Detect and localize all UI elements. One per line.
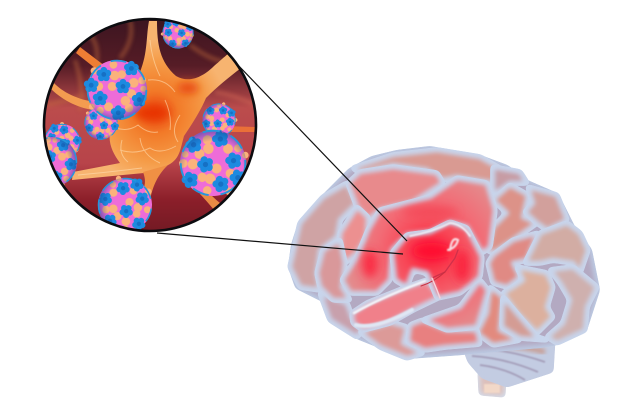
gyrus: left G xyxy=(317,240,350,300)
gyrus: lower right xyxy=(423,280,488,330)
gyrus: top xyxy=(353,150,503,183)
neuron cell body xyxy=(72,21,241,180)
gyrus: R4 xyxy=(525,223,588,273)
inset circle: neuron with virus particles xyxy=(42,18,258,232)
sulcus lines xyxy=(354,223,470,326)
gyrus: bottom mid xyxy=(408,320,480,350)
gyrus: R3 xyxy=(488,233,538,287)
inflamed red zones xyxy=(362,207,470,282)
gyrus: bottom left xyxy=(320,293,363,337)
gyrus: upper right xyxy=(493,167,527,195)
neuron left arm xyxy=(52,83,90,110)
gyrus: R8 xyxy=(502,297,547,340)
gyrus: R2 xyxy=(525,187,567,230)
gyrus: R7 xyxy=(477,287,520,345)
neuron lower process xyxy=(143,165,168,196)
inset background xyxy=(44,19,256,231)
gyrus: R6 xyxy=(547,267,597,343)
neuron right lower process xyxy=(200,194,220,208)
neuron right process xyxy=(230,126,255,132)
blurred background fibres xyxy=(46,20,255,110)
gyrus: left F xyxy=(340,207,368,263)
gyrus: R5 xyxy=(503,267,553,333)
gyrus: frontal left xyxy=(290,183,357,290)
inset ring xyxy=(44,19,256,231)
callout line: upper xyxy=(236,63,407,241)
gyrus: R1 xyxy=(487,185,537,253)
neuron upper-left arm xyxy=(76,47,102,68)
brain stem xyxy=(479,372,505,396)
brain xyxy=(290,148,598,396)
cerebellum xyxy=(462,338,555,387)
cerebrum base xyxy=(290,148,598,357)
gyrus: top frontal xyxy=(348,167,443,220)
gyrus: bottom xyxy=(360,322,423,358)
gyrus: central hot xyxy=(392,222,482,298)
callout line: lower xyxy=(157,233,403,254)
neuron hot spot xyxy=(134,82,199,121)
virus particles xyxy=(46,21,249,230)
gyrus: lower xyxy=(352,280,440,330)
membrane wrinkles xyxy=(78,40,180,175)
gyri xyxy=(290,150,597,358)
gyrus: central surround xyxy=(342,178,495,293)
